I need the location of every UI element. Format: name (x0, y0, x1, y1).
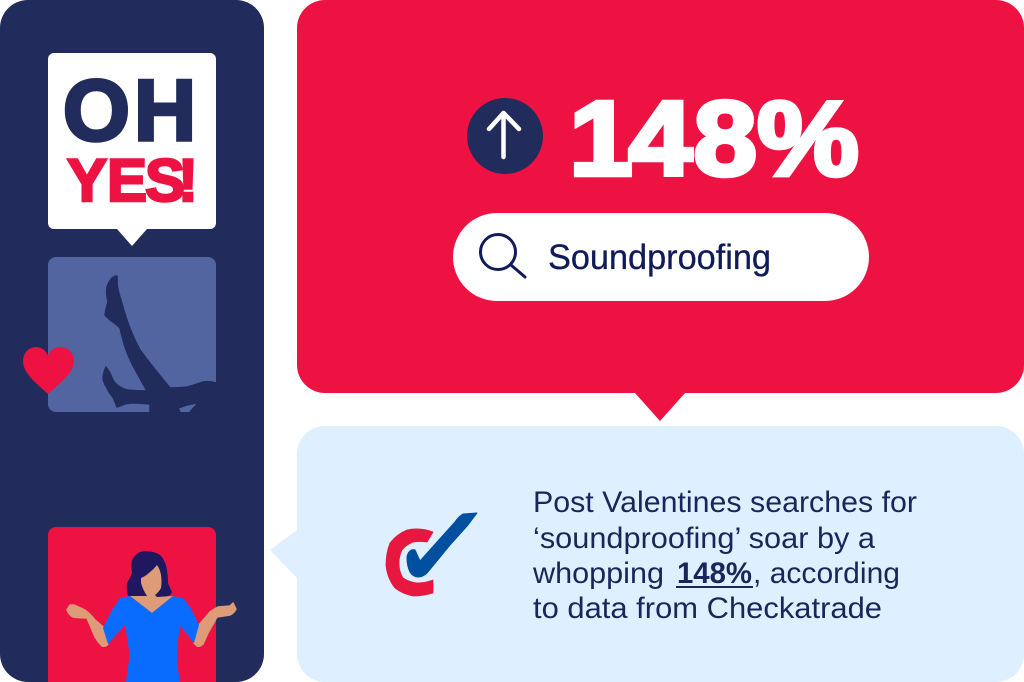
line 3: according: , according (753, 557, 900, 590)
line 1: Post Valentines searches for (533, 486, 917, 519)
search term: Soundproofing (548, 238, 771, 277)
panel: red search stat callout (297, 0, 1024, 421)
panel: left navy column (0, 0, 264, 682)
speech bubble: OH YES! (48, 53, 216, 246)
panel: light blue description callout (270, 426, 1024, 682)
illustration: woman shrugging (48, 527, 236, 682)
illustration: legs in the air (48, 257, 216, 412)
icon: up arrow in circle (467, 98, 543, 174)
heading: OH: OH (63, 63, 196, 159)
body text (532, 486, 917, 625)
line 2: ‘soundproofing’ soar by a (533, 522, 875, 555)
big number: 148%: 148% (569, 80, 859, 198)
line 3: whopping: whopping (532, 557, 664, 590)
icon: heart (23, 347, 74, 394)
heading: YES!: YES! (67, 147, 198, 214)
icon: Checkatrade logo (386, 513, 477, 596)
line 3: emphasised 148%: 148% (677, 557, 752, 590)
line 4: to data from Checkatrade (533, 592, 882, 625)
search bar (453, 213, 869, 301)
icon: magnifying glass (480, 234, 525, 277)
